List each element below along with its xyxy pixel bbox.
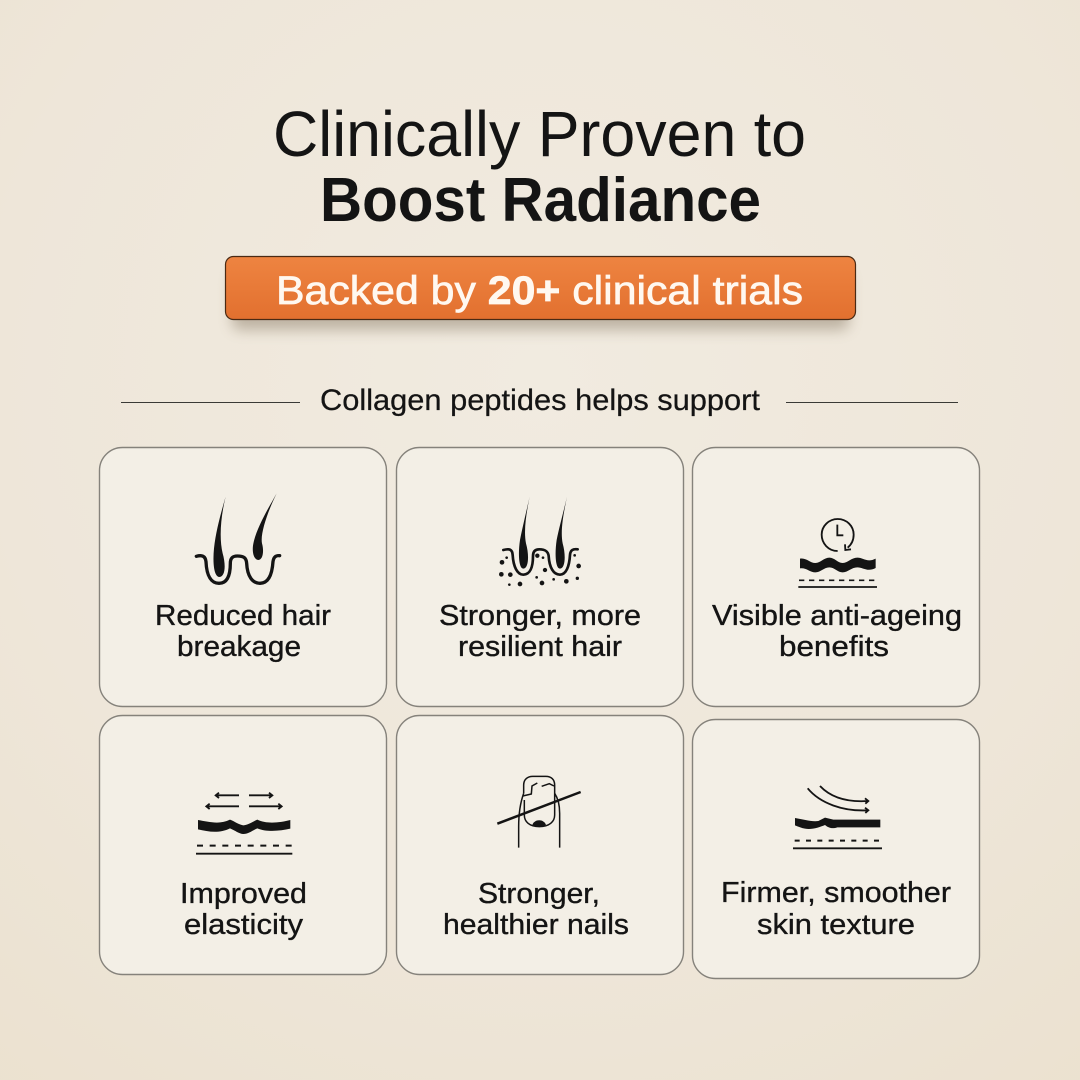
panel: stronger, healthier nails (396, 716, 684, 974)
panel: firmer, smoother skin texture (692, 720, 980, 978)
panel: visible anti-ageing benefits (692, 448, 980, 706)
label: elasticity (184, 909, 304, 941)
label: resilient hair (458, 631, 622, 663)
label: Visible anti-ageing (712, 600, 962, 632)
label: Improved (180, 878, 307, 910)
label: breakage (177, 631, 301, 663)
label (439, 600, 641, 663)
icon: smoothing arrows over skin (793, 786, 882, 848)
badge: clinical trials (226, 256, 856, 330)
label (712, 600, 962, 663)
title (273, 98, 806, 235)
icon: hair follicles (196, 493, 280, 583)
label (443, 878, 629, 941)
label: healthier nails (443, 909, 629, 941)
label: benefits (779, 631, 889, 663)
subheading with rules: Collagen peptides helps support (320, 384, 761, 417)
title: Clinically Proven to (273, 98, 806, 170)
badge: clinical trials: Backed by 20+ clinical trials (276, 269, 803, 313)
label: Stronger, (478, 878, 600, 910)
icon: clock over skin wave (798, 519, 877, 587)
icon: skin stretching arrows (196, 793, 292, 854)
label: skin texture (757, 909, 915, 941)
label (721, 877, 951, 941)
label: Reduced hair (155, 600, 331, 632)
label (180, 878, 307, 941)
icon: fingernail (497, 776, 581, 848)
label (155, 600, 331, 663)
panel: improved elasticity (100, 716, 386, 974)
icon: hair follicles with dots (499, 497, 581, 586)
panel: reduced hair breakage (100, 448, 386, 706)
panel: stronger, more resilient hair (396, 448, 684, 706)
label: Stronger, more (439, 600, 641, 632)
title: Boost Radiance (320, 166, 761, 235)
label: Firmer, smoother (721, 877, 951, 909)
